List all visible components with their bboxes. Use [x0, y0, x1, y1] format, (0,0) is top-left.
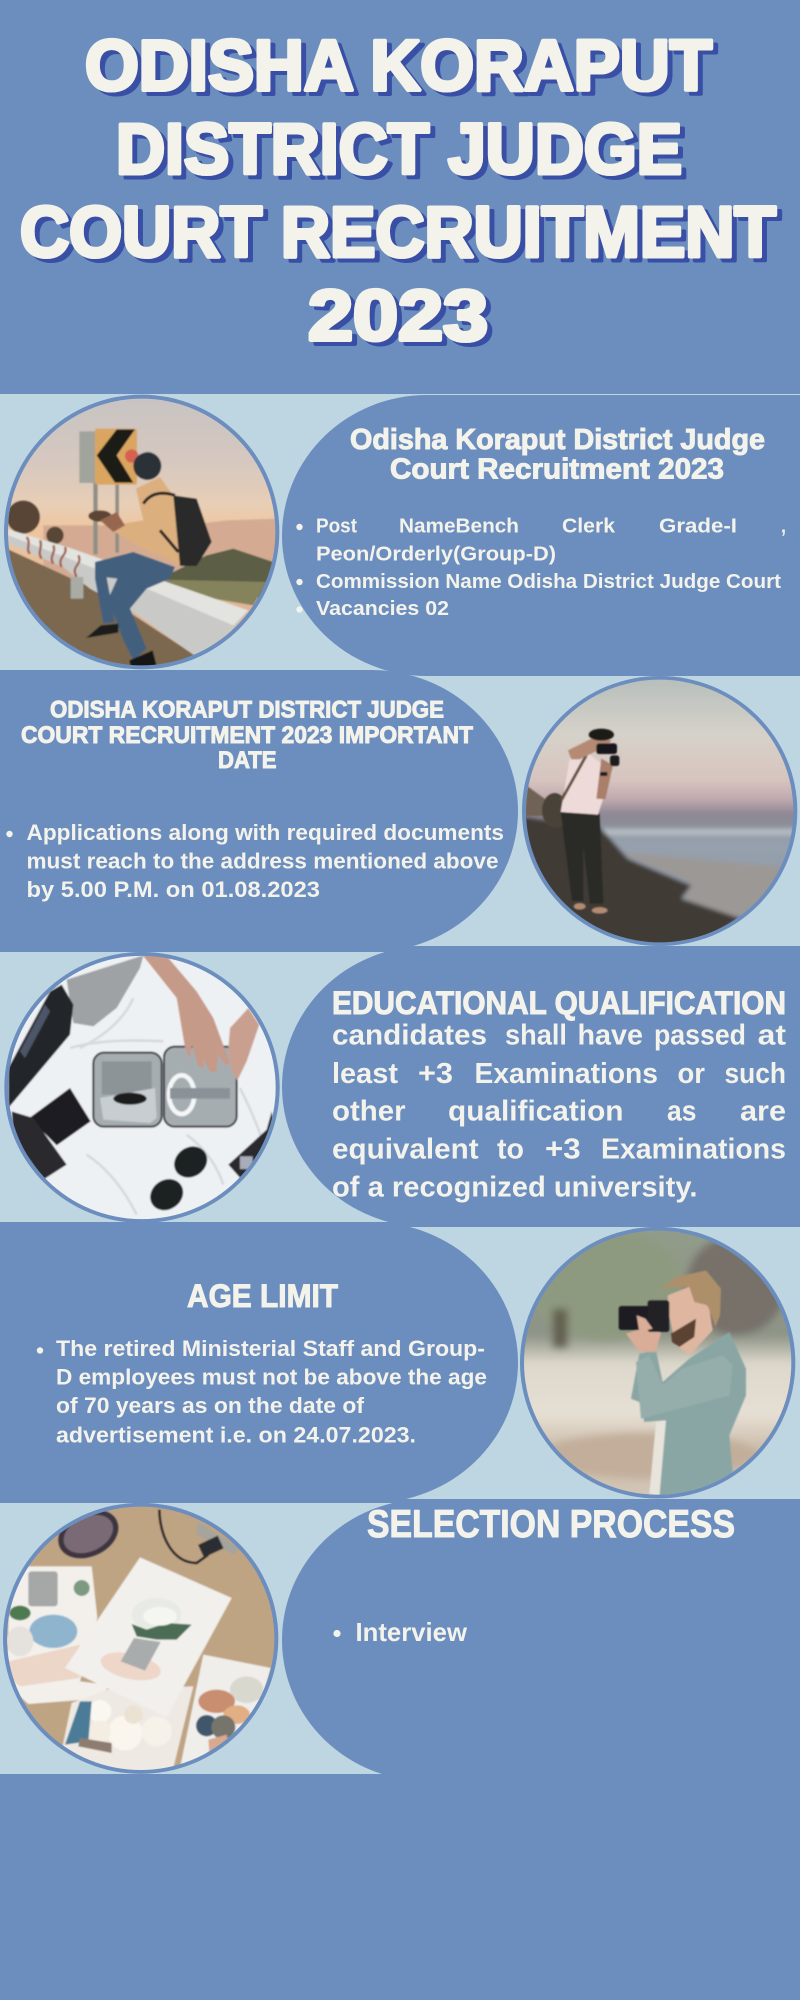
bullet list: post, commission, vacancies: Grade-I	[659, 515, 737, 538]
bullet: age requirement: of 70 years as on the date of	[56, 1393, 365, 1418]
panel text: age limit	[37, 1278, 487, 1448]
paragraph: qualification requirement: other	[332, 1096, 406, 1128]
heading: recruitment overview: Court Recruitment 2023	[390, 454, 724, 486]
bullet: application deadline: must reach to the address mentioned above	[26, 849, 499, 874]
bullet: age requirement: D employees must not be above the age	[56, 1365, 487, 1390]
paragraph: qualification requirement: Examinations	[474, 1058, 658, 1090]
panel: selection process shape	[282, 1499, 800, 1781]
paragraph: qualification requirement: are	[740, 1096, 786, 1128]
paragraph: qualification requirement: equivalent	[332, 1134, 479, 1166]
paragraph: qualification requirement: shall	[505, 1020, 567, 1052]
paragraph: qualification requirement: +3	[418, 1058, 453, 1090]
bullet list: post, commission, vacancies: Clerk	[562, 515, 616, 538]
bullet: interview: Interview	[356, 1617, 468, 1647]
paragraph: qualification requirement: as	[667, 1096, 696, 1128]
panel text: important date	[6, 696, 504, 902]
panel text: post details	[296, 424, 786, 620]
bullet: application deadline	[6, 820, 504, 902]
paragraph: qualification requirement: +3	[545, 1134, 581, 1166]
paragraph: qualification requirement: have	[578, 1020, 643, 1052]
panel text: educational qualification	[332, 985, 786, 1203]
bullet list: post, commission, vacancies: NameBench	[399, 515, 519, 538]
paragraph: qualification requirement: Examinations	[601, 1134, 786, 1166]
heading: selection process: SELECTION PROCESS	[367, 1503, 735, 1546]
panel: age limit shape	[0, 1222, 518, 1503]
light background bands	[0, 394, 800, 1774]
paragraph: qualification requirement: passed	[654, 1020, 746, 1052]
photo: travel pouch and camera on bed	[0, 948, 283, 1231]
panel text: selection process	[333, 1503, 735, 1647]
paragraph: qualification requirement: such	[724, 1058, 786, 1090]
panel: post details shape	[282, 395, 800, 676]
bullet list: post, commission, vacancies: ,	[781, 515, 786, 538]
paragraph: qualification requirement: or	[678, 1058, 705, 1090]
bullet list: post, commission, vacancies: Commission Name Odisha District Judge Court	[316, 570, 781, 593]
panel: important date shape	[0, 670, 518, 952]
paragraph: qualification requirement: to	[497, 1134, 524, 1166]
bullet: age requirement: advertisement i.e. on 24.07.2023.	[56, 1422, 416, 1448]
paragraph: qualification requirement: at	[758, 1020, 786, 1052]
paragraph: qualification requirement: candidates	[332, 1020, 487, 1052]
heading: recruitment overview	[350, 424, 765, 486]
photo: printed floral photos on wooden table	[0, 1498, 283, 1781]
bullet: application deadline: Applications along with required documents	[26, 820, 504, 845]
photo: photographer with DSLR in field	[516, 1222, 799, 1505]
bullet: age requirement: The retired Ministerial Staff and Group-	[56, 1336, 485, 1361]
heading: recruitment overview: Odisha Koraput District Judge	[350, 424, 765, 456]
paragraph: qualification requirement: of a recognized university.	[332, 1171, 698, 1203]
paragraph: qualification requirement: qualification	[448, 1096, 624, 1128]
title: ODISHA KORAPUT	[85, 27, 712, 106]
title	[20, 27, 776, 356]
title: COURT RECRUITMENT	[20, 194, 776, 272]
heading: important date: ODISHA KORAPUT DISTRICT JUDGE	[50, 696, 444, 724]
heading: important date: COURT RECRUITMENT 2023 IMPORTANT	[21, 722, 473, 749]
photo: photographer on beach at dusk	[518, 672, 800, 955]
heading: age limit: AGE LIMIT	[187, 1278, 338, 1314]
photo: hiker with camera on guard rail	[0, 392, 283, 675]
paragraph: qualification requirement	[332, 1020, 786, 1203]
title: 2023	[308, 277, 488, 356]
bullet list: post, commission, vacancies: Post	[316, 515, 357, 538]
bullet list: post, commission, vacancies	[296, 515, 786, 620]
paragraph: qualification requirement: least	[332, 1058, 398, 1090]
bullet list: post, commission, vacancies: Vacancies 02	[316, 597, 449, 620]
bullet list: post, commission, vacancies: Peon/Orderly(Group-D)	[316, 542, 556, 566]
bullet: application deadline: by 5.00 P.M. on 01.08.2023	[26, 877, 320, 902]
heading: important date	[21, 696, 473, 774]
heading: important date: DATE	[218, 747, 276, 774]
panel: educational qualification shape	[282, 946, 800, 1227]
bullet: age requirement	[37, 1336, 487, 1448]
title: DISTRICT JUDGE	[116, 110, 682, 190]
